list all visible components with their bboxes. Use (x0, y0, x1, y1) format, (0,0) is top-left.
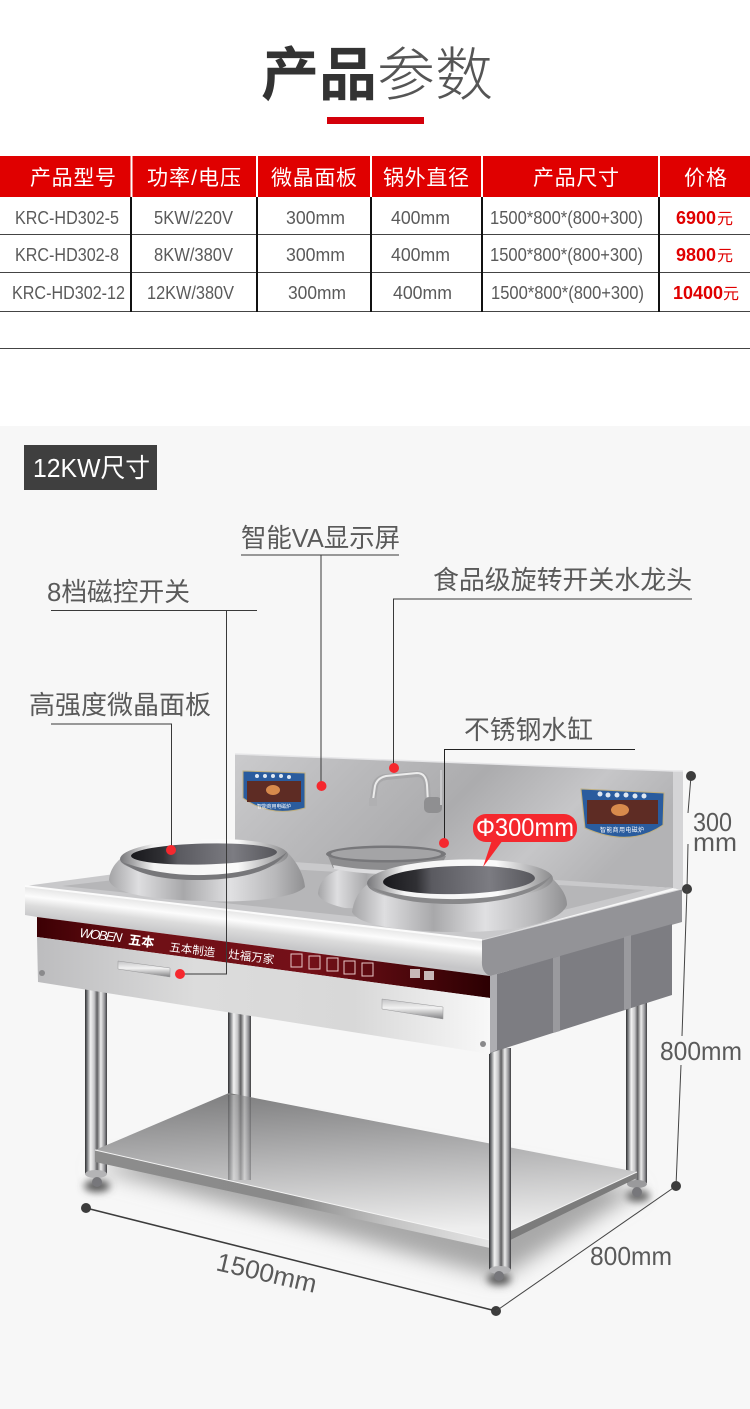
callout: wok diameter 300mm (473, 814, 577, 867)
left control panel: 智能商用电磁炉 (257, 803, 291, 810)
table row: KRC-HD302-12: 元 (723, 286, 739, 303)
table row: KRC-HD302-5: 300mm (286, 208, 345, 228)
drawer (37, 937, 490, 1054)
right control panel: 智能商用电磁炉 (600, 826, 644, 834)
drawer handles (118, 961, 443, 1019)
dimension: depth 800mm: 800mm (590, 1241, 672, 1271)
left control panel (243, 771, 305, 811)
right wok (352, 857, 567, 932)
table row: KRC-HD302-8: 8KW/380V (154, 245, 233, 265)
front right leg (489, 1048, 511, 1281)
callout: high-strength ceramic panel (29, 690, 211, 855)
callout: 8-level magnetic switch: 8档磁控开关 (47, 577, 190, 607)
table row: KRC-HD302-5: KRC-HD302-5 (15, 208, 119, 228)
callout: high-strength ceramic panel: 高强度微晶面板 (29, 690, 211, 720)
side panel (490, 924, 672, 1053)
table header row: 产品尺寸 (533, 167, 619, 190)
table row: KRC-HD302-8: 1500*800*(800+300) (490, 245, 643, 265)
backsplash (235, 754, 683, 890)
callout: stainless steel water tank: 不锈钢水缸 (464, 715, 593, 745)
dimension: height 800mm (660, 889, 742, 1186)
red band with brand text: 五本制造 (169, 940, 216, 960)
table row: KRC-HD302-12: 400mm (393, 283, 452, 303)
right control panel (581, 789, 664, 837)
dimension: height 800mm: 800mm (660, 1036, 742, 1066)
heading: product parameters: 参数 (377, 43, 493, 108)
callout: food-grade rotating faucet (389, 565, 692, 773)
back legs (228, 995, 647, 1197)
table header row (0, 156, 750, 197)
table header row: 功率/电压 (147, 167, 241, 190)
dimension: height 300mm: 300 (693, 807, 732, 837)
dimension: height 300mm: mm (693, 827, 737, 857)
table row: KRC-HD302-12: 300mm (288, 283, 346, 303)
table row: KRC-HD302-8: KRC-HD302-8 (15, 245, 119, 265)
middle pot (318, 846, 446, 910)
dimension: width 1500mm (81, 1203, 501, 1316)
table row: KRC-HD302-5 (15, 208, 733, 228)
heading: product parameters (261, 43, 493, 124)
front left leg (85, 988, 107, 1187)
table row: KRC-HD302-5: 6900 (676, 208, 716, 228)
floor shadow (84, 1130, 650, 1285)
table row: KRC-HD302-8 (15, 245, 733, 265)
red band with brand text (37, 917, 490, 998)
countertop (25, 858, 682, 976)
table row: KRC-HD302-5: 5KW/220V (154, 208, 233, 228)
table row: KRC-HD302-8: 9800 (676, 245, 716, 265)
callout: smart VA display (241, 523, 400, 791)
dimension: height 300mm (682, 771, 737, 894)
table row: KRC-HD302-8: 400mm (391, 245, 450, 265)
dimension: depth 800mm (496, 1181, 681, 1311)
water faucet (369, 770, 442, 813)
table row: KRC-HD302-12: 1500*800*(800+300) (491, 283, 644, 303)
table row: KRC-HD302-12: 12KW/380V (147, 283, 234, 303)
lower shelf (95, 1093, 637, 1250)
illustration: induction stove (25, 754, 683, 1285)
table row: KRC-HD302-12: 10400 (673, 283, 723, 303)
red band with brand text: 灶福万家 (228, 947, 275, 967)
table header row: 价格 (684, 167, 727, 190)
table row: KRC-HD302-8: 元 (717, 248, 733, 265)
tag: 12KW size (24, 445, 157, 490)
heading: product parameters: 产品 (261, 43, 377, 108)
callout: food-grade rotating faucet: 食品级旋转开关水龙头 (433, 565, 692, 595)
table row: KRC-HD302-8: 300mm (286, 245, 345, 265)
table header row: 锅外直径 (383, 167, 469, 190)
table header row: 产品型号 (30, 167, 116, 190)
table row: KRC-HD302-5: 400mm (391, 208, 450, 228)
table row: KRC-HD302-12: KRC-HD302-12 (12, 283, 125, 303)
callout: stainless steel water tank (439, 715, 635, 848)
page background: white (0, 0, 750, 426)
red band with brand text: 五本 (128, 932, 155, 950)
table grid lines (0, 197, 750, 349)
callout: wok diameter 300mm: Φ300mm (476, 814, 574, 842)
tag: 12KW size: 12KW尺寸 (33, 453, 150, 483)
callout: smart VA display: 智能VA显示屏 (241, 523, 400, 553)
table row: KRC-HD302-12 (12, 283, 739, 303)
red band with brand text: WOBEN (79, 925, 124, 945)
dimension: width 1500mm: 1500mm (214, 1247, 320, 1299)
panel: dimensions background (0, 426, 750, 1409)
table row: KRC-HD302-5: 1500*800*(800+300) (490, 208, 643, 228)
callout: 8-level magnetic switch (47, 577, 257, 979)
left wok (109, 837, 305, 901)
spec table (0, 156, 750, 349)
table header row: 微晶面板 (271, 167, 357, 190)
table row: KRC-HD302-5: 元 (717, 211, 733, 228)
